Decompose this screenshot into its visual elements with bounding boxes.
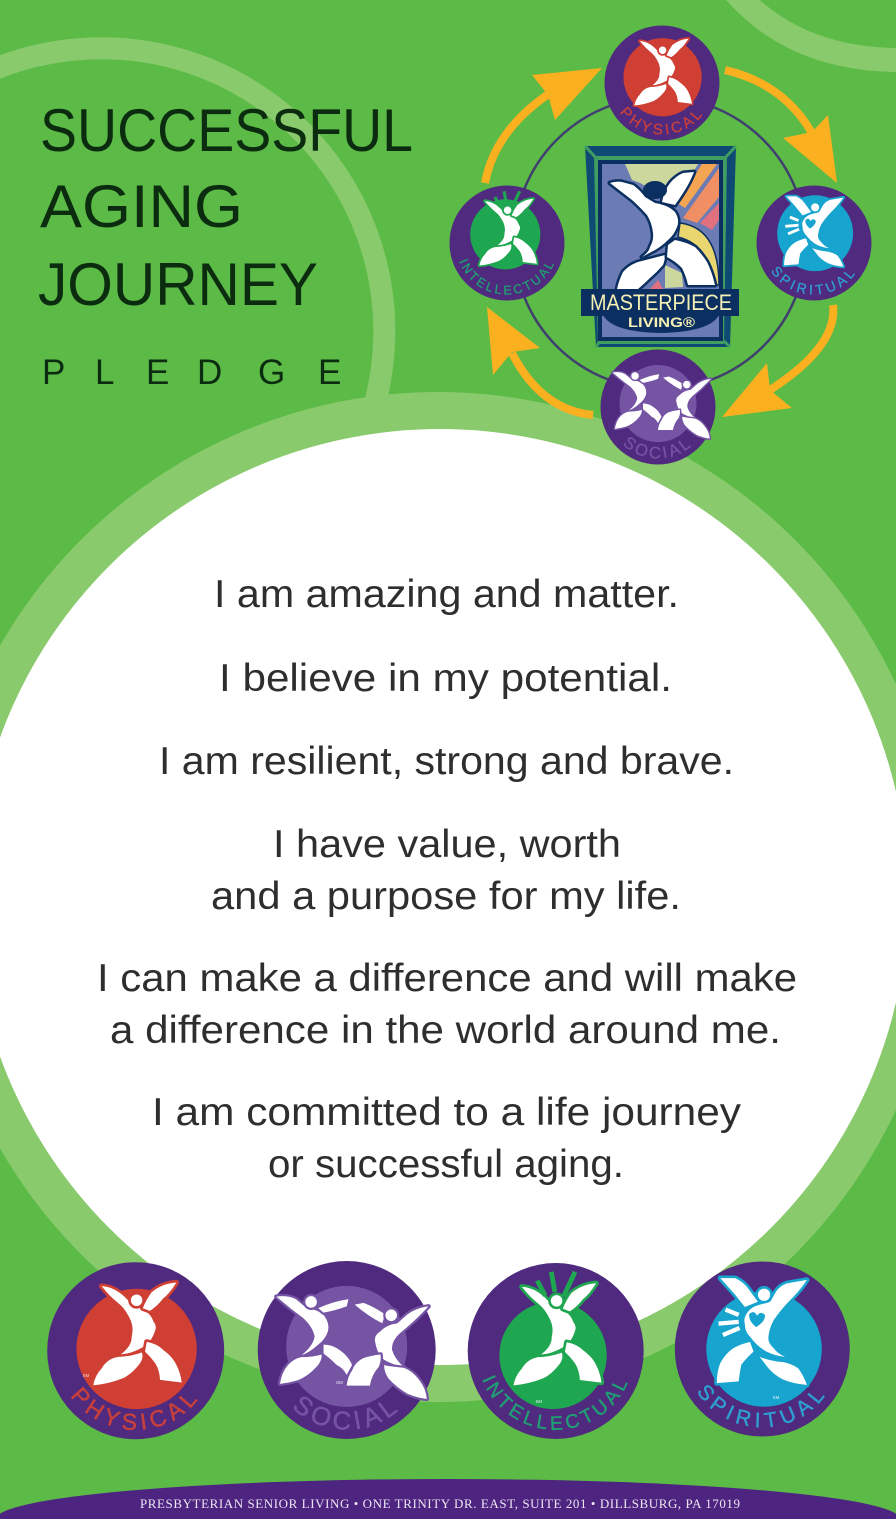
arc: top-left light ring [0,48,384,420]
arrow: physical to spiritual [725,70,837,183]
pledge text: I believe in my potential. [219,657,672,700]
badge: intellectual large: INTELLECTUAL [482,1375,628,1430]
badge: social large [258,1261,436,1439]
badge: intellectual large: SM [535,1399,542,1404]
pledge text: I am amazing and matter. [214,573,679,616]
title: AGING [40,173,243,240]
title: JOURNEY [38,251,318,318]
pledge text: or successful aging. [268,1143,624,1186]
badge: physical large: PHYSICAL [71,1386,198,1430]
pledge text: I have value, worth [273,823,621,866]
arrow: social to intellectual [487,307,593,415]
badge: social large: SOCIAL [294,1396,398,1430]
badge: physical large [47,1262,224,1440]
logo figure head [643,181,667,199]
badge: spiritual large: SM [773,1395,780,1400]
logo figure [610,172,715,289]
pledge text: I can make a difference and will make [97,957,797,1000]
logo sub wordmark: LIVING® [628,314,696,330]
badge: physical small: PHYSICAL [620,106,702,135]
wheel diagram [450,26,872,464]
arrow: intellectual to physical [485,68,602,183]
arrow: spiritual to social [722,305,833,417]
logo: Masterpiece Living [581,146,739,347]
badge: intellectual small: INTELLECTUAL [459,258,554,295]
badge: spiritual small: SPIRITUAL [772,266,855,295]
connecting ring [514,97,806,389]
pledge text [97,573,797,1186]
logo banner [581,289,739,316]
badge: spiritual small [756,186,872,300]
badge: spiritual large: SPIRITUAL [698,1385,825,1428]
badge: spiritual large [674,1262,850,1436]
logo wordmark: MASTERPIECE [590,290,732,315]
large light ring [0,392,896,1402]
footer band [0,1479,896,1519]
arc: top-right light ring [735,0,896,60]
pledge text: I am committed to a life journey [152,1091,742,1134]
pledge text: I am resilient, strong and brave. [159,740,734,783]
badge: intellectual large [468,1263,644,1439]
badge: physical large: SM [83,1373,90,1378]
badge: social large: SM [336,1380,343,1385]
pledge text: and a purpose for my life. [211,875,681,918]
pledge text: a difference in the world around me. [110,1009,781,1052]
title: SUCCESSFUL [40,97,413,164]
large white circle [0,429,896,1365]
badge: physical small [604,26,720,140]
title [38,97,413,318]
subtitle: pledge: PLEDGE [42,353,341,392]
badge: intellectual small [450,186,564,300]
badge: social small [600,350,716,464]
badge: social small: SOCIAL [624,437,691,459]
footer address: PRESBYTERIAN SENIOR LIVING • ONE TRINITY DR. EAST, SUITE 201 • DILLSBURG, PA 17019 [140,1496,740,1511]
